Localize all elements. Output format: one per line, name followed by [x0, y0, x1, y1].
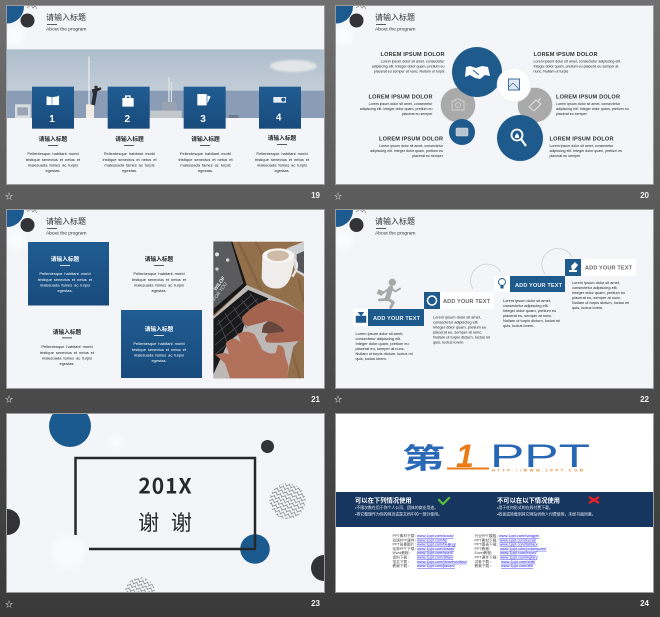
step 4: Lorem ipsum dolor sit amet, — [572, 280, 620, 285]
photo: laptop and coffee — [212, 242, 304, 378]
arc arrow 2 — [542, 248, 572, 274]
links right column: PPT图表下载： — [474, 542, 500, 547]
text block top middle: egestas. — [151, 288, 167, 293]
step 4: quis, luctus lorem. — [572, 305, 603, 310]
usage allowed: •将它整理作为你的网页或是文档中的一部分使用。 — [355, 512, 442, 516]
links left column: www.1ppt.com/ziliao/ — [417, 554, 454, 560]
slide 23 footer — [5, 599, 321, 609]
step 1: Integer dolor quam, pretium eu — [356, 341, 409, 346]
links right column: www.1ppt.com/sucai/ — [500, 537, 537, 542]
card 1 text: 请输入标题 — [39, 135, 68, 143]
heading — [46, 12, 87, 32]
year title: 201X — [138, 470, 193, 500]
thanks text: 谢 谢 — [138, 507, 192, 537]
photo: laptop and coffee: FOR YOU — [212, 281, 228, 302]
slide 20: circle diagram — [319, 0, 654, 184]
panel: blue bottom middle: Pellentesque habitant morbi — [133, 341, 185, 346]
icon: notebook — [197, 94, 211, 105]
text middle left: placerat eu semper — [402, 112, 433, 116]
text block top middle: tristique senectus et netus et — [132, 277, 187, 282]
usage not allowed: •收录或转载到其它网站供他人付费使用，未经书面同意。 — [497, 512, 596, 516]
links right column: www.1ppt.com/shiti/ — [501, 559, 536, 564]
gray circle: camera — [440, 88, 476, 122]
links left column: Word教程： — [392, 550, 412, 555]
step 1: consectetur adipiscing elit. — [356, 336, 401, 341]
links right column: www.1ppt.com/hangye/ — [499, 533, 540, 538]
card 2: 2 — [125, 114, 131, 125]
icon: book — [46, 95, 59, 105]
slide 22 footer — [334, 395, 650, 404]
heading — [375, 216, 416, 236]
corner decoration — [336, 210, 366, 232]
slide 23 footer: 23 — [311, 599, 321, 608]
step 1 — [353, 309, 424, 361]
blue circle behind frame corner — [240, 534, 270, 564]
step 2: Lorem ipsum dolor sit amet, — [433, 314, 481, 320]
slide 21 footer: 21 — [311, 395, 321, 404]
links right column: 行业PPT模板： — [474, 533, 500, 538]
text top left: Lorem ipsum dolor sit amet, consectetur — [381, 60, 445, 64]
corner decoration — [7, 210, 38, 232]
links right column: www.1ppt.com/kejian/ — [500, 554, 539, 560]
step 3: Nullam ut turpis dictum, luctus mi — [503, 318, 560, 323]
heading — [46, 216, 87, 236]
heading: 请输入标题 — [46, 216, 86, 226]
arc arrow 1 — [471, 264, 501, 289]
step 2: consectetur adipiscing elit. — [433, 320, 479, 324]
card 3 text: malesuada fames ac turpis — [180, 162, 231, 168]
text top left: adipiscing elit. Integer dolor quam, pretium eu — [372, 64, 444, 68]
step 1: quis, luctus lorem. — [356, 356, 387, 361]
card 1 text — [26, 135, 81, 173]
links left column: www.1ppt.com/word/ — [417, 550, 454, 555]
panel: blue top left: tristique senectus et netus et — [38, 277, 93, 282]
card 2 text: egestas. — [122, 168, 137, 173]
links left column: 教案下载： — [392, 563, 411, 568]
links right column: www.1ppt.com/tubiao/ — [500, 542, 538, 547]
photo: city and sea — [7, 49, 324, 118]
card 1 text: malesuada fames ac turpis — [28, 162, 78, 168]
icon: pen badge — [569, 262, 578, 272]
heading: About the program — [46, 230, 87, 236]
card 1 text: Pellentesque habitant morbi — [27, 151, 79, 156]
corner decoration — [7, 6, 38, 28]
text middle right: placerat eu semper — [556, 112, 588, 116]
links right column: Excel教程： — [474, 550, 495, 555]
links right column: 教案下载： — [474, 563, 493, 568]
links left column: 优秀PPT下载： — [392, 546, 418, 551]
step 3 — [494, 276, 565, 328]
links left column: PPT素材下载： — [392, 533, 418, 538]
icon: red cross — [589, 497, 599, 503]
usage not allowed: •用于任何形式的在线付费下载。 — [497, 505, 553, 510]
step 3: ADD YOUR TEXT — [515, 283, 563, 289]
step 3: quis, luctus lorem. — [503, 323, 534, 328]
links right column: PPT课件下载： — [474, 554, 500, 560]
step 1: placerat eu, semper at nunc. — [356, 346, 405, 351]
logo — [402, 437, 590, 477]
text block top middle: Pellentesque habitant morbi — [133, 271, 185, 276]
links right column: PPT教程： — [474, 546, 493, 551]
slide 20 footer: ☆ — [334, 192, 342, 201]
card 4 text: egestas. — [274, 168, 290, 173]
step 3: placerat eu, semper at nunc. — [503, 313, 552, 318]
text top right: nunc. Nullam ut turpis — [534, 70, 568, 74]
links right column: www.1ppt.com/excel/ — [500, 550, 537, 555]
text block top middle: 请输入标题 — [145, 255, 174, 263]
panel: blue bottom middle: tristique senectus et netus et — [132, 347, 187, 352]
usage allowed — [355, 496, 450, 516]
large blue circle: search — [497, 115, 543, 161]
card 2 text: Pellentesque habitant morbi — [104, 151, 155, 156]
panel: blue bottom middle: malesuada fames ac turpis — [134, 352, 184, 358]
card 4 text: tristique senectus et netus et — [255, 157, 310, 162]
step 2 — [424, 292, 494, 344]
slide 21 footer — [5, 395, 321, 404]
step 3: Integer dolor quam, pretium eu — [503, 308, 556, 313]
logo: HTTP://WWW.1PPT.COM — [492, 468, 584, 472]
corner decoration — [336, 6, 366, 28]
card 3 text — [178, 135, 233, 173]
slide 20 footer — [334, 191, 650, 201]
step 4 — [565, 259, 636, 310]
step 1: ADD YOUR TEXT — [373, 316, 421, 322]
gray circle: brush — [518, 88, 552, 122]
icon: phone badge — [428, 296, 436, 305]
text bottom right: LOREM IPSUM DOLOR — [550, 136, 614, 142]
step 2: placerat eu, semper at nunc. — [433, 330, 482, 334]
circle diagram — [440, 47, 552, 161]
links left column: www.1ppt.com/xiazai/ — [417, 546, 455, 551]
step 3: Lorem ipsum dolor sit amet, — [503, 298, 551, 303]
card 4 — [259, 87, 301, 129]
heading: 请输入标题 — [46, 12, 86, 22]
text bottom left: LOREM IPSUM DOLOR — [379, 136, 443, 142]
step 4: Integer dolor quam, pretium eu — [572, 290, 625, 295]
step 3: consectetur adipiscing elit. — [503, 303, 549, 308]
white circle: image — [497, 68, 531, 102]
panel: blue top left: egestas. — [57, 288, 73, 293]
card 2 text: tristique senectus et netus et — [102, 157, 157, 162]
icon: running figure — [377, 279, 400, 307]
card 3 — [184, 87, 226, 129]
text bottom right: adipiscing elit. Integer dolor quam, pretium eu — [550, 149, 622, 153]
text middle right: Lorem ipsum dolor sit amet, consectetur — [556, 102, 621, 106]
slide 22: staircase process — [335, 209, 654, 389]
icon: check mark — [438, 497, 450, 505]
text middle left: Lorem ipsum dolor sit amet, consectetur — [369, 102, 433, 106]
text top left — [372, 52, 445, 74]
text middle right: LOREM IPSUM DOLOR — [556, 94, 620, 100]
heading: About the program — [46, 26, 87, 32]
step 1: Lorem ipsum dolor sit amet, — [356, 331, 404, 336]
text top left: LOREM IPSUM DOLOR — [380, 52, 444, 58]
links left column: www.1ppt.com/sucai/ — [417, 533, 454, 538]
text top right: Lorem ipsum dolor sit amet, consectetur adipiscing elit. — [534, 60, 621, 64]
card 4 text — [255, 134, 310, 173]
card 2 — [108, 87, 150, 129]
links right column: www.1ppt.com/powerpoint/ — [500, 546, 547, 551]
card 4 text: malesuada fames ac turpis — [257, 162, 307, 168]
panel: blue bottom middle: 请输入标题 — [145, 325, 174, 333]
small blue circle: screen — [449, 119, 475, 145]
slide 21: text panels and laptop photo — [0, 193, 324, 388]
text middle left — [360, 94, 433, 116]
text middle right — [556, 94, 629, 116]
card 2 text — [102, 135, 157, 173]
text bottom left — [370, 136, 444, 158]
icon: projector — [273, 97, 286, 103]
step 4: Nullam ut turpis dictum, luctus mi — [572, 300, 629, 305]
card 2 text: malesuada fames ac turpis — [104, 162, 155, 168]
card 1 text: egestas. — [45, 168, 61, 173]
text middle left: LOREM IPSUM DOLOR — [368, 94, 432, 100]
dark band — [336, 492, 653, 527]
text block bottom left: malesuada fames ac turpis — [42, 356, 92, 360]
logo: PPT — [490, 438, 590, 474]
text block bottom left: egestas. — [59, 361, 75, 366]
slide 19 footer — [5, 191, 321, 201]
slide 19 footer: 19 — [311, 191, 321, 200]
text top right: Integer dolor quam, pretium eu placerat eu semper at — [534, 64, 618, 68]
usage allowed: 可以在下列情况使用 — [355, 496, 412, 504]
card 2 text: 请输入标题 — [115, 135, 144, 143]
card 1 — [32, 87, 74, 129]
step 2: Nullam ut turpis dictum, luctus mi — [433, 334, 490, 340]
card 3 text: tristique senectus et netus et — [178, 157, 233, 162]
text bottom right: placerat eu semper — [550, 154, 581, 158]
heading: About the program — [375, 230, 416, 236]
slide 23 footer: ☆ — [5, 600, 13, 609]
text block bottom left: Pellentesque habitant morbi — [41, 344, 93, 349]
heading — [375, 12, 416, 32]
card 4 text: 请输入标题 — [268, 134, 297, 142]
card 4 text: Pellentesque habitant morbi — [256, 151, 308, 156]
card 3 text: Pellentesque habitant morbi — [180, 151, 231, 156]
text middle left: adipiscing elit. Integer dolor quam, pretium eu — [360, 107, 432, 111]
card 1: 1 — [49, 114, 55, 125]
slide 24 number: 24 — [640, 599, 650, 608]
decorative circles — [7, 414, 324, 592]
step 2: quis, luctus lorem. — [433, 340, 464, 344]
icon: light bulb — [498, 278, 506, 288]
frame — [76, 458, 255, 549]
text top right — [534, 52, 621, 74]
card 4: 4 — [276, 113, 282, 124]
step 1: Nullam ut turpis dictum, luctus mi — [356, 351, 413, 356]
links left column: www.1ppt.com/beijing/ — [417, 542, 457, 547]
panel: blue bottom middle — [121, 310, 202, 378]
slide 22 footer: ☆ — [334, 395, 342, 404]
usage not allowed: 不可以在以下情况使用 — [497, 496, 560, 504]
panel: blue top left: malesuada fames ac turpis — [40, 282, 90, 288]
links left column: www.1ppt.com/kj/ — [417, 537, 448, 542]
slide 24: brand page — [336, 414, 654, 592]
logo: 第 — [402, 437, 445, 477]
text bottom right: Lorem ipsum dolor sit amet, consectetur — [550, 144, 614, 148]
links left column: PPT背景图片： — [392, 542, 418, 547]
step 2: Integer dolor quam, pretium eu — [433, 324, 486, 330]
text top right: LOREM IPSUM DOLOR — [534, 52, 598, 58]
heading: 请输入标题 — [375, 216, 415, 226]
slide 19 footer: ☆ — [5, 192, 13, 201]
blue circle: handshake — [452, 47, 502, 97]
card 3: 3 — [200, 114, 206, 125]
heading: 请输入标题 — [375, 12, 415, 22]
links left column: 资料下载： — [392, 554, 411, 560]
text bottom left: placerat eu semper — [412, 154, 444, 158]
text bottom right — [550, 136, 622, 158]
icon: tv — [356, 312, 366, 322]
step 4: consectetur adipiscing elit. — [572, 285, 618, 290]
links left column: www.1ppt.com/fanwen/ziliao/ — [417, 559, 468, 564]
icon: briefcase — [122, 95, 134, 107]
links left column — [392, 533, 468, 568]
text block bottom left: tristique senectus et netus et — [40, 350, 95, 355]
links left column: www.1ppt.com/jiaoan/ — [417, 563, 456, 568]
card 3 text: 请输入标题 — [191, 135, 220, 143]
links left column: 双语PPT课件： — [392, 537, 418, 542]
usage not allowed — [497, 496, 599, 516]
step 4: placerat eu, semper at nunc. — [572, 295, 621, 300]
panel: blue top left: 请输入标题 — [51, 255, 80, 263]
logo: 1 — [456, 438, 474, 474]
panel: blue top left: Pellentesque habitant morbi — [39, 271, 91, 276]
usage allowed: •不限次数在用于你个人公司、团体的商业用途。 — [355, 505, 438, 510]
text top left: placerat eu semper at nunc. Nullam ut turpis — [374, 70, 445, 74]
links left column: 范文下载： — [392, 559, 411, 564]
links right column: www.1ppt.com/ziti/ — [501, 563, 534, 568]
text middle right: adipiscing elit. Integer dolor quam, pretium eu — [556, 107, 629, 111]
text block bottom left — [40, 328, 95, 366]
links right column: PPT素材下载： — [474, 537, 500, 542]
text bottom left: adipiscing elit. Integer dolor quam, pretium eu — [370, 149, 443, 153]
text block top middle — [132, 255, 187, 293]
card 1 text: tristique senectus et netus et — [26, 157, 81, 162]
slide 23: thank you — [6, 413, 325, 593]
step 2: ADD YOUR TEXT — [443, 299, 491, 305]
text block top middle: malesuada fames ac turpis — [134, 282, 184, 288]
slide 20 footer: 20 — [640, 191, 650, 200]
slide 22 footer: 22 — [640, 395, 650, 404]
step 4: ADD YOUR TEXT — [585, 266, 633, 272]
slide 19: four numbered cards over photo — [0, 0, 324, 184]
photo: laptop and coffee: WILOF — [213, 275, 227, 292]
slide 21 footer: ☆ — [5, 395, 13, 404]
text bottom left: Lorem ipsum dolor sit amet, consectetur — [379, 144, 444, 148]
panel: blue bottom middle: egestas. — [151, 358, 167, 363]
card 3 text: egestas. — [198, 168, 213, 173]
text block bottom left: 请输入标题 — [53, 328, 82, 336]
panel: blue top left — [28, 242, 109, 306]
heading: About the program — [375, 26, 416, 32]
links right column — [474, 533, 547, 568]
links right column: 试卷下载： — [474, 559, 493, 564]
